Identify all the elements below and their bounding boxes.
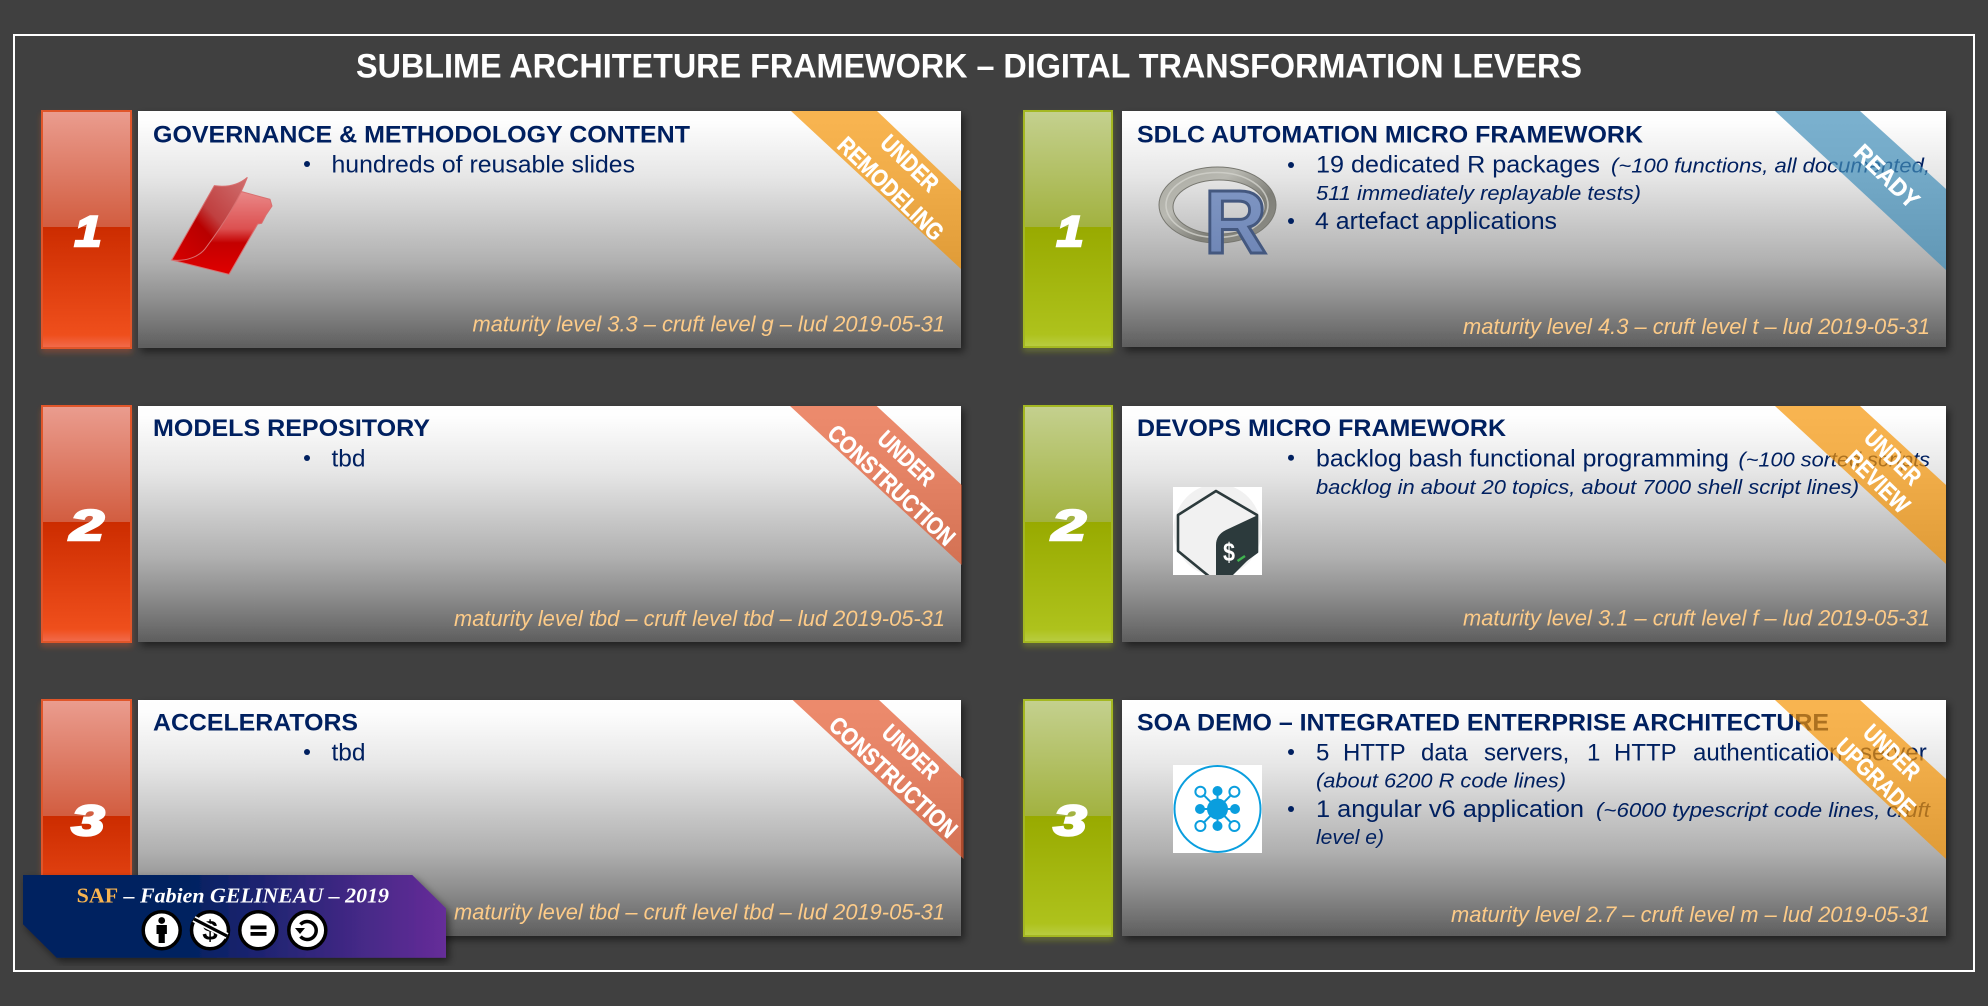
bullets (1288, 740, 1931, 849)
card background (138, 111, 961, 348)
icon: non commercial (192, 912, 228, 949)
bullets: 1 angular v6 application (1316, 796, 1584, 823)
bullet (304, 446, 366, 473)
panel: accelerators (41, 699, 964, 937)
bullets: backlog bash functional programming (1316, 446, 1729, 473)
panel: devops micro framework (1023, 405, 1946, 643)
card background (1122, 700, 1946, 936)
number bar 3 left: 3 (72, 797, 105, 845)
panel: sdlc automation micro framework (1023, 110, 1946, 348)
ribbon: under review (1775, 406, 1946, 564)
author credit: SAF – Fabien GELINEAU – 2019 (77, 884, 390, 908)
card background (138, 700, 961, 936)
footer status: maturity level tbd – cruft level tbd – lud 2019-05-31 (454, 606, 945, 631)
bullets: backlog in about 20 topics, about 7000 shell script lines) (1316, 476, 1859, 499)
bullets: server (1860, 740, 1927, 767)
bullets: (about 6200 R code lines) (1316, 770, 1566, 793)
number bar 2 right (1023, 405, 1113, 643)
card background (1122, 406, 1946, 642)
ribbon: under construction: UNDER (872, 426, 940, 492)
icon: R logo (1159, 167, 1276, 273)
author banner with licence icons (23, 875, 446, 958)
ribbon: under upgrade (1775, 700, 1946, 859)
number bar 2 left: 2 (69, 502, 104, 550)
number bar 1 left: 1 (74, 208, 102, 256)
icon: bash logo: $ (1223, 537, 1235, 567)
bullets: (~100 functions, all documented, (1611, 155, 1930, 178)
ribbon: under upgrade: UNDER (1857, 719, 1925, 786)
number bar 1 right (1023, 110, 1113, 348)
ribbon: under review: UNDER (1858, 424, 1926, 491)
bullets: (~6000 typescript code lines, cruft (1596, 799, 1931, 822)
ribbon: under construction: CONSTRUCTION (823, 712, 962, 844)
bullets: 19 dedicated R packages (1316, 152, 1600, 179)
icon: non commercial: $ (202, 915, 218, 946)
bullets (1288, 446, 1930, 499)
icon: network hub (1173, 765, 1262, 853)
bullets: level e) (1316, 826, 1384, 849)
bullets: data (1421, 740, 1468, 767)
ribbon: ready (1775, 111, 1946, 270)
heading: SOA DEMO – INTEGRATED ENTERPRISE ARCHITECTURE (1137, 710, 1829, 737)
bullets: 5 (1316, 740, 1329, 767)
ribbon: under upgrade: UPGRADE (1830, 733, 1920, 822)
heading: MODELS REPOSITORY (153, 415, 430, 442)
heading: DEVOPS MICRO FRAMEWORK (1137, 415, 1507, 442)
icon: R logo: R (1204, 173, 1267, 273)
ribbon: under remodeling: UNDER (875, 130, 944, 198)
icon: no derivatives (240, 912, 277, 949)
footer status: maturity level 3.3 – cruft level g – lud 2019-05-31 (472, 312, 945, 337)
footer status: maturity level tbd – cruft level tbd – lud 2019-05-31 (454, 900, 945, 924)
icon: share alike (289, 912, 326, 949)
heading: ACCELERATORS (153, 710, 358, 737)
number bar 1 right: 1 (1056, 208, 1084, 256)
footer status: maturity level 4.3 – cruft level t – lud 2019-05-31 (1463, 314, 1930, 339)
heading: GOVERNANCE & METHODOLOGY CONTENT (153, 122, 690, 148)
number bar 2 left (41, 405, 132, 643)
panel: soa demo integrated enterprise architecture (1023, 699, 1946, 937)
bullets: 511 immediately replayable tests) (1316, 182, 1641, 205)
icon: attribution (143, 912, 180, 949)
ribbon: under review: REVIEW (1840, 445, 1915, 519)
ribbon: under construction (793, 700, 964, 859)
ribbon: under construction (790, 406, 962, 565)
ribbon: under remodeling (791, 111, 961, 269)
card background (138, 406, 961, 642)
bullets: HTTP (1614, 740, 1677, 767)
panel: models repository (41, 405, 962, 643)
number bar 1 left (41, 110, 132, 349)
number bar 2 right: 2 (1051, 502, 1086, 550)
card background (1122, 111, 1946, 347)
bullet: hundreds of reusable slides (332, 152, 635, 179)
ribbon: ready: READY (1848, 139, 1924, 214)
title: SUBLIME ARCHITETURE FRAMEWORK – DIGITAL TRANSFORMATION LEVERS (356, 48, 1582, 86)
number bar 3 right: 3 (1054, 797, 1087, 845)
bullets: 1 (1587, 740, 1600, 767)
number bar 3 left (41, 699, 132, 937)
ribbon: under construction: UNDER (876, 719, 944, 785)
panel: governance and methodology content (41, 110, 961, 349)
ribbon: under construction: CONSTRUCTION (822, 420, 960, 552)
bullets (1288, 152, 1930, 235)
number bar 3 right (1023, 699, 1113, 937)
bullets: 4 artefact applications (1315, 208, 1557, 235)
bullet (304, 740, 366, 767)
bullet: tbd (332, 740, 366, 767)
icon: bash logo (1173, 487, 1262, 575)
footer status: maturity level 3.1 – cruft level f – lud 2019-05-31 (1463, 606, 1930, 631)
heading: SDLC AUTOMATION MICRO FRAMEWORK (1137, 121, 1644, 148)
bullets: servers, (1484, 740, 1569, 767)
icon: red folder (172, 177, 272, 274)
bullets: HTTP (1343, 740, 1406, 767)
footer status: maturity level 2.7 – cruft level m – lud 2019-05-31 (1451, 902, 1930, 927)
bullet: tbd (332, 446, 366, 473)
bullets: (~100 sorted scripts (1738, 449, 1930, 472)
bullets: authentication (1693, 740, 1842, 767)
ribbon: under remodeling: REMODELING (832, 132, 949, 247)
